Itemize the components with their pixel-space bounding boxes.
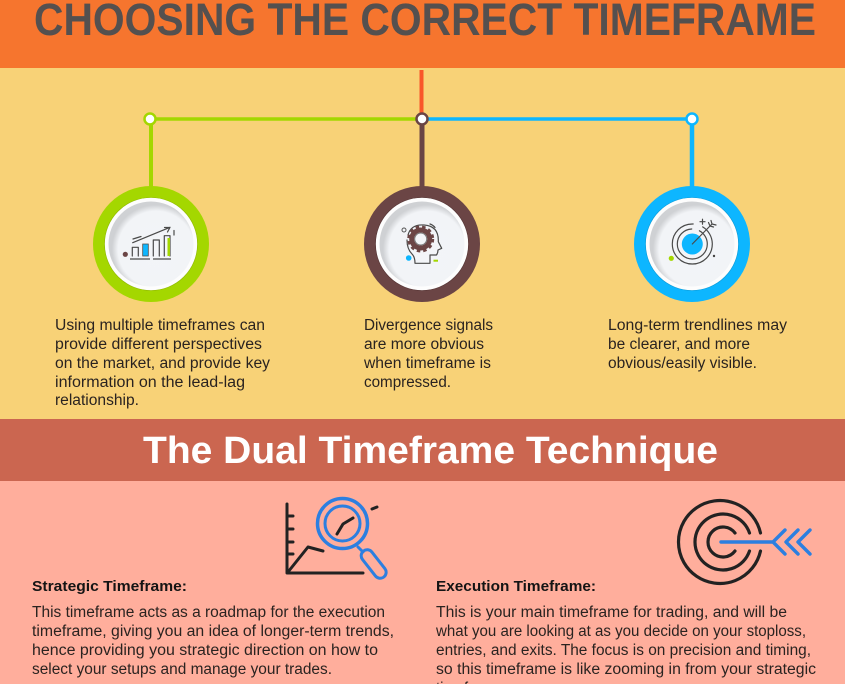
text block: strategic timeframe: This timeframe acts as a roadmap for the execution bbox=[32, 604, 385, 621]
icon: head with gear badge bbox=[364, 186, 480, 302]
text block: strategic timeframe bbox=[32, 578, 394, 678]
icon: target and arrow badge bbox=[634, 186, 750, 302]
title banner bbox=[0, 0, 845, 68]
text block: divergence signals bbox=[363, 317, 493, 391]
icon: chart with magnifier bbox=[287, 498, 389, 581]
text block: long-term trendlines: obvious/easily visible. bbox=[608, 355, 757, 372]
panel: cream background bbox=[0, 68, 845, 419]
text block: strategic timeframe: hence providing you strategic direction on how to bbox=[32, 642, 378, 659]
subheading: Execution Timeframe: bbox=[436, 578, 596, 595]
icon: rising bar chart badge bbox=[93, 186, 209, 302]
text block: execution timeframe: what you are looking at as you decide on your stoploss, bbox=[435, 623, 806, 640]
text block: execution timeframe: This is your main timeframe for trading, and will be bbox=[436, 604, 787, 621]
text block: multiple timeframes: Using multiple timeframes can bbox=[55, 317, 265, 334]
subheading: Strategic Timeframe: bbox=[32, 578, 187, 595]
text block: strategic timeframe: timeframe, giving you an idea of longer-term trends, bbox=[32, 623, 394, 640]
text block: divergence signals: are more obvious bbox=[364, 336, 484, 353]
text block: multiple timeframes: relationship. bbox=[55, 392, 139, 409]
text block: strategic timeframe: select your setups and manage your trades. bbox=[32, 661, 332, 678]
text block: long-term trendlines: be clearer, and more bbox=[608, 336, 750, 353]
section heading banner bbox=[0, 419, 845, 481]
text block: multiple timeframes: on the market, and provide key bbox=[55, 355, 270, 372]
text block: execution timeframe bbox=[435, 578, 816, 684]
text block: execution timeframe: so this timeframe is like zooming in from your strategic bbox=[436, 661, 816, 678]
heading: The Dual Timeframe Technique bbox=[143, 430, 718, 472]
text block: multiple timeframes: information on the lead-lag bbox=[55, 374, 245, 391]
text block: multiple timeframes bbox=[55, 317, 270, 409]
text block: long-term trendlines: Long-term trendlines may bbox=[608, 317, 787, 334]
text block: divergence signals: Divergence signals bbox=[364, 317, 493, 334]
icon: bullseye with arrow bbox=[678, 500, 810, 584]
connector tree bbox=[144, 70, 698, 190]
text block: divergence signals: compressed. bbox=[364, 374, 451, 391]
panel: salmon background bbox=[0, 481, 845, 684]
text block: long-term trendlines bbox=[608, 317, 787, 372]
text block: execution timeframe: entries, and exits. The focus is on precision and timing, bbox=[436, 642, 811, 659]
text block: multiple timeframes: provide different perspectives bbox=[55, 336, 262, 353]
text block: divergence signals: when timeframe is bbox=[363, 355, 491, 372]
